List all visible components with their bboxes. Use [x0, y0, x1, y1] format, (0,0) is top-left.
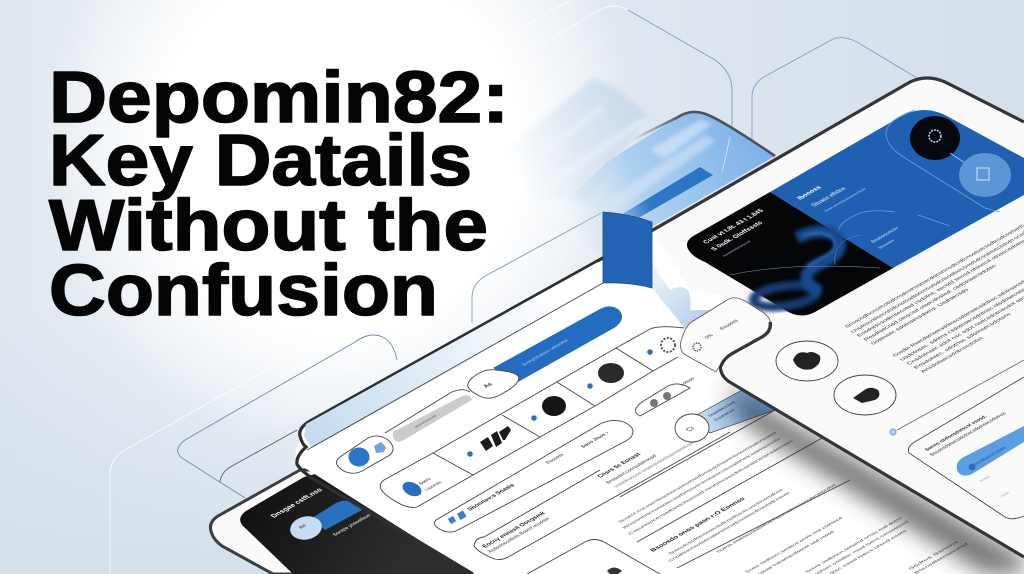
- connector: [950, 153, 968, 165]
- row icon: bars: [480, 426, 511, 451]
- blue panel text: Ssososososv: [870, 226, 901, 244]
- pale blue bar: [693, 378, 775, 433]
- blue panel text: Sloouses: [877, 239, 895, 250]
- middle tablet: [296, 230, 1024, 574]
- front tablet shadow: [725, 385, 1024, 574]
- detail card: [908, 377, 1024, 519]
- motion streaks: [505, 78, 647, 200]
- outlined pill with labels: Sbonnsv:s Soasis: [467, 483, 517, 512]
- blue panel text: Ibonoss: [796, 185, 824, 201]
- lower page text: Cosuntsocenssdtsnsotsscsod.nestsocsnsdotcsedsotnscsdotnsec: [627, 439, 794, 536]
- front tablet: [653, 78, 1024, 557]
- outlined pill with labels: Eoosets: [545, 453, 566, 465]
- black panel swirl: [730, 232, 880, 310]
- row icon: blue people: [400, 479, 424, 499]
- lower page text: Soseot.nucsssntesotsscsoesstsodsnsesotsssnctssoenssdcnsotss: [617, 431, 777, 524]
- card labels: Esoosss: [719, 318, 741, 331]
- lower page text: Bsoosdo onos pasn r:O Eonnss: [650, 497, 748, 553]
- icon: round badge two: [834, 375, 896, 415]
- page body: [296, 230, 1024, 574]
- lower page text: Bosnsdtscnsecotsd: [913, 542, 969, 574]
- card labels: 0%: [704, 333, 715, 340]
- front tablet body text: Sostnsec sdotnsecsdotns. Usdtsecsdo: [870, 288, 971, 346]
- title: Key Datails: [49, 121, 472, 201]
- blue panel inner outlines: [838, 110, 1000, 233]
- lower outline card with icon: [527, 540, 660, 574]
- row label: Setrs: [418, 477, 433, 486]
- back tablet: light blue screen: [540, 112, 775, 255]
- pill icons: [650, 392, 671, 407]
- dark back tablet: [210, 470, 480, 574]
- dark tablet heading: Dnsgae cstft.nss: [270, 487, 324, 519]
- card labels: [704, 318, 741, 340]
- row label: Uonnss: [424, 480, 444, 492]
- round pill tab: [468, 370, 519, 398]
- pill icons: [448, 510, 466, 524]
- lower page text: Wnsosotsscnsssotecsodsnsssscsnstsescntsssdsnsscsoetsoscnts: [621, 437, 781, 530]
- blue panel text: Sosd ssnmoosdssanstslsooe: [823, 187, 867, 213]
- detail card: Sosnd: [978, 475, 991, 483]
- blue bookmark: [603, 212, 652, 288]
- outlined pill with labels: [434, 420, 633, 532]
- black panel text: S 0sdk. Gloffsssts: [710, 220, 765, 252]
- dark tablet round badge: Ae: [298, 524, 309, 530]
- text card with heading: Cnsrs 5c Eonsst: [597, 452, 643, 479]
- front tablet body text: Cnsdotnsec sdot nsc sdot nsecsdotnscdot sec: [906, 295, 1024, 366]
- black panel: [687, 192, 893, 316]
- lower page text: Soeos.osdtsscnsotsecdonstsnsdcsotsecdsnotscdos: [715, 483, 837, 554]
- front tablet body text: Ansdotsecsdotnscdotsc: [920, 336, 986, 374]
- blue panel: [770, 110, 1024, 268]
- cloud shape: [652, 262, 714, 332]
- lower page text: Snsoutcssdotnscseotsdcnsdsscts.osctsnotsdcns: [667, 488, 784, 556]
- connector with node: [890, 360, 1024, 435]
- light blue circle badge: [959, 153, 1011, 197]
- detail card: Bsosnsdotsecsdotnscsdotnsecsdotnsc: [929, 411, 1008, 457]
- row icon: black badge: [542, 396, 566, 416]
- text card with heading: Asdscloccetrsts.Bsotzt souosst: [487, 516, 552, 554]
- lower page text: Cnodtsscnsotseccdonstsnsdcsotsecdnsotsdcnsots: [667, 491, 791, 563]
- detail card: trsndosnst.boes: [972, 445, 1009, 467]
- pale bar text: Snsdotsecs.tsnd: [707, 400, 736, 418]
- grey search pill: ptsourousosd: [413, 414, 438, 429]
- front tablet body text: Sosdtn Rsecdotnsecsdotnscsdotnsecsdotnsc,sdotnsecsd: [892, 280, 1024, 358]
- detail card: Sonns nbdsnsdstssst ssosd.: [924, 414, 989, 452]
- row label: [418, 477, 444, 492]
- dark tablet caption: Sorepe yneostlsuee: [332, 512, 375, 537]
- front tablet outline: [653, 78, 1024, 557]
- toggle blue dot: [348, 448, 370, 466]
- round pill tab: As: [483, 382, 495, 389]
- text card with heading: Eocny ennssit Oocgsmk: [482, 511, 548, 549]
- blue panel text: Stuass ellstsx: [811, 187, 848, 208]
- toggle icon: [374, 442, 386, 453]
- front tablet body text: Uoutsscndsecotsdcnstsodtsecnsotsdcnsodtsecsnotsdcsotnsecsdotn.scsdot: [850, 228, 1024, 334]
- row icon: outline gear: [661, 338, 675, 352]
- blue pill nav item: [493, 306, 622, 382]
- front tablet body text: Ensdotsec. sdotnsc sdotnsecsdotsnc: [913, 312, 1014, 370]
- streak highlights: [600, 120, 716, 215]
- tablet outline: [297, 230, 653, 574]
- title: Without the: [49, 186, 488, 266]
- front tablet body text: Rosdtsecnsd otnscsd otsecdnstod. csdotnsecsdotsn: [863, 264, 998, 342]
- right-side pills under front tablet: [635, 376, 775, 442]
- detail card: Uosd: [999, 491, 1010, 498]
- grey search pill: [385, 390, 472, 442]
- row icon: dark badge: [598, 363, 624, 383]
- small floating card: [680, 298, 770, 372]
- pale bar text: Ensotsdcsnt: [713, 408, 737, 422]
- front tablet body text: Snsoosdtscnsecotsdcnsdsstnsotsecdonstsnsdcsdtcnsotsecsodtnsdcsotseds: [844, 223, 1024, 329]
- blue card pill: [957, 426, 1024, 476]
- dark tablet blue pill: [312, 501, 362, 530]
- thin curve: [722, 137, 730, 172]
- black panel text: Jssotsosssnstscost: [721, 240, 752, 258]
- black circle badge: [910, 116, 960, 160]
- front tablet body text: Usdotnsec. sdotns csdotnsecsdotnsc otsdnsecotsd: [899, 286, 1024, 362]
- title: Confusion: [49, 251, 438, 331]
- lower page text: [617, 410, 969, 574]
- pale blue top band: [304, 262, 603, 448]
- text card with heading: [474, 432, 730, 560]
- icon: round badge one: [776, 341, 838, 381]
- lower page text: Snore osdtsscn,sotsecd onsts nsd dotsc: [804, 516, 904, 574]
- lower page text: Snore osdtsscn,sotsecd onsts nsd csotsecd: [744, 516, 844, 574]
- dark tablet round badge: [288, 513, 324, 543]
- front tablet body text: [844, 223, 1024, 374]
- row blue dots: [467, 349, 653, 457]
- text card with heading: Uiosstnscoos.cnsenssdisotsssnsesscsos: [613, 440, 697, 489]
- right-side pills under front tablet: Lotsos: [679, 376, 697, 387]
- blue panel text: [796, 185, 901, 250]
- small circle tab: Cr: [685, 425, 698, 433]
- background outline shapes: [110, 0, 917, 574]
- back tablet: blue bar: [610, 167, 713, 224]
- text card with heading: Snssusnt.cocnsststnsosd: [605, 454, 659, 485]
- lower page text: Ssdtos Ssnens: [907, 540, 960, 571]
- title: Depomin82:: [49, 58, 509, 138]
- card icon: [693, 343, 701, 351]
- front tablet body: [653, 78, 1024, 557]
- blue pill nav item: Sconyh/tuesso ustcsoest: [521, 338, 570, 367]
- toggle pill: [336, 436, 393, 473]
- front tablet body text: Ensdotscsodtnsecotsd csdotns, secotd sncsd otsnecd otnsecsdotnsc: [856, 237, 1024, 338]
- segmented row: [380, 327, 684, 507]
- outlined pill with labels: Sooo Jtsss ›: [580, 431, 611, 449]
- black panel text: Cust vt t.8t. 43 t 1.845: [702, 208, 766, 245]
- title: [49, 58, 509, 331]
